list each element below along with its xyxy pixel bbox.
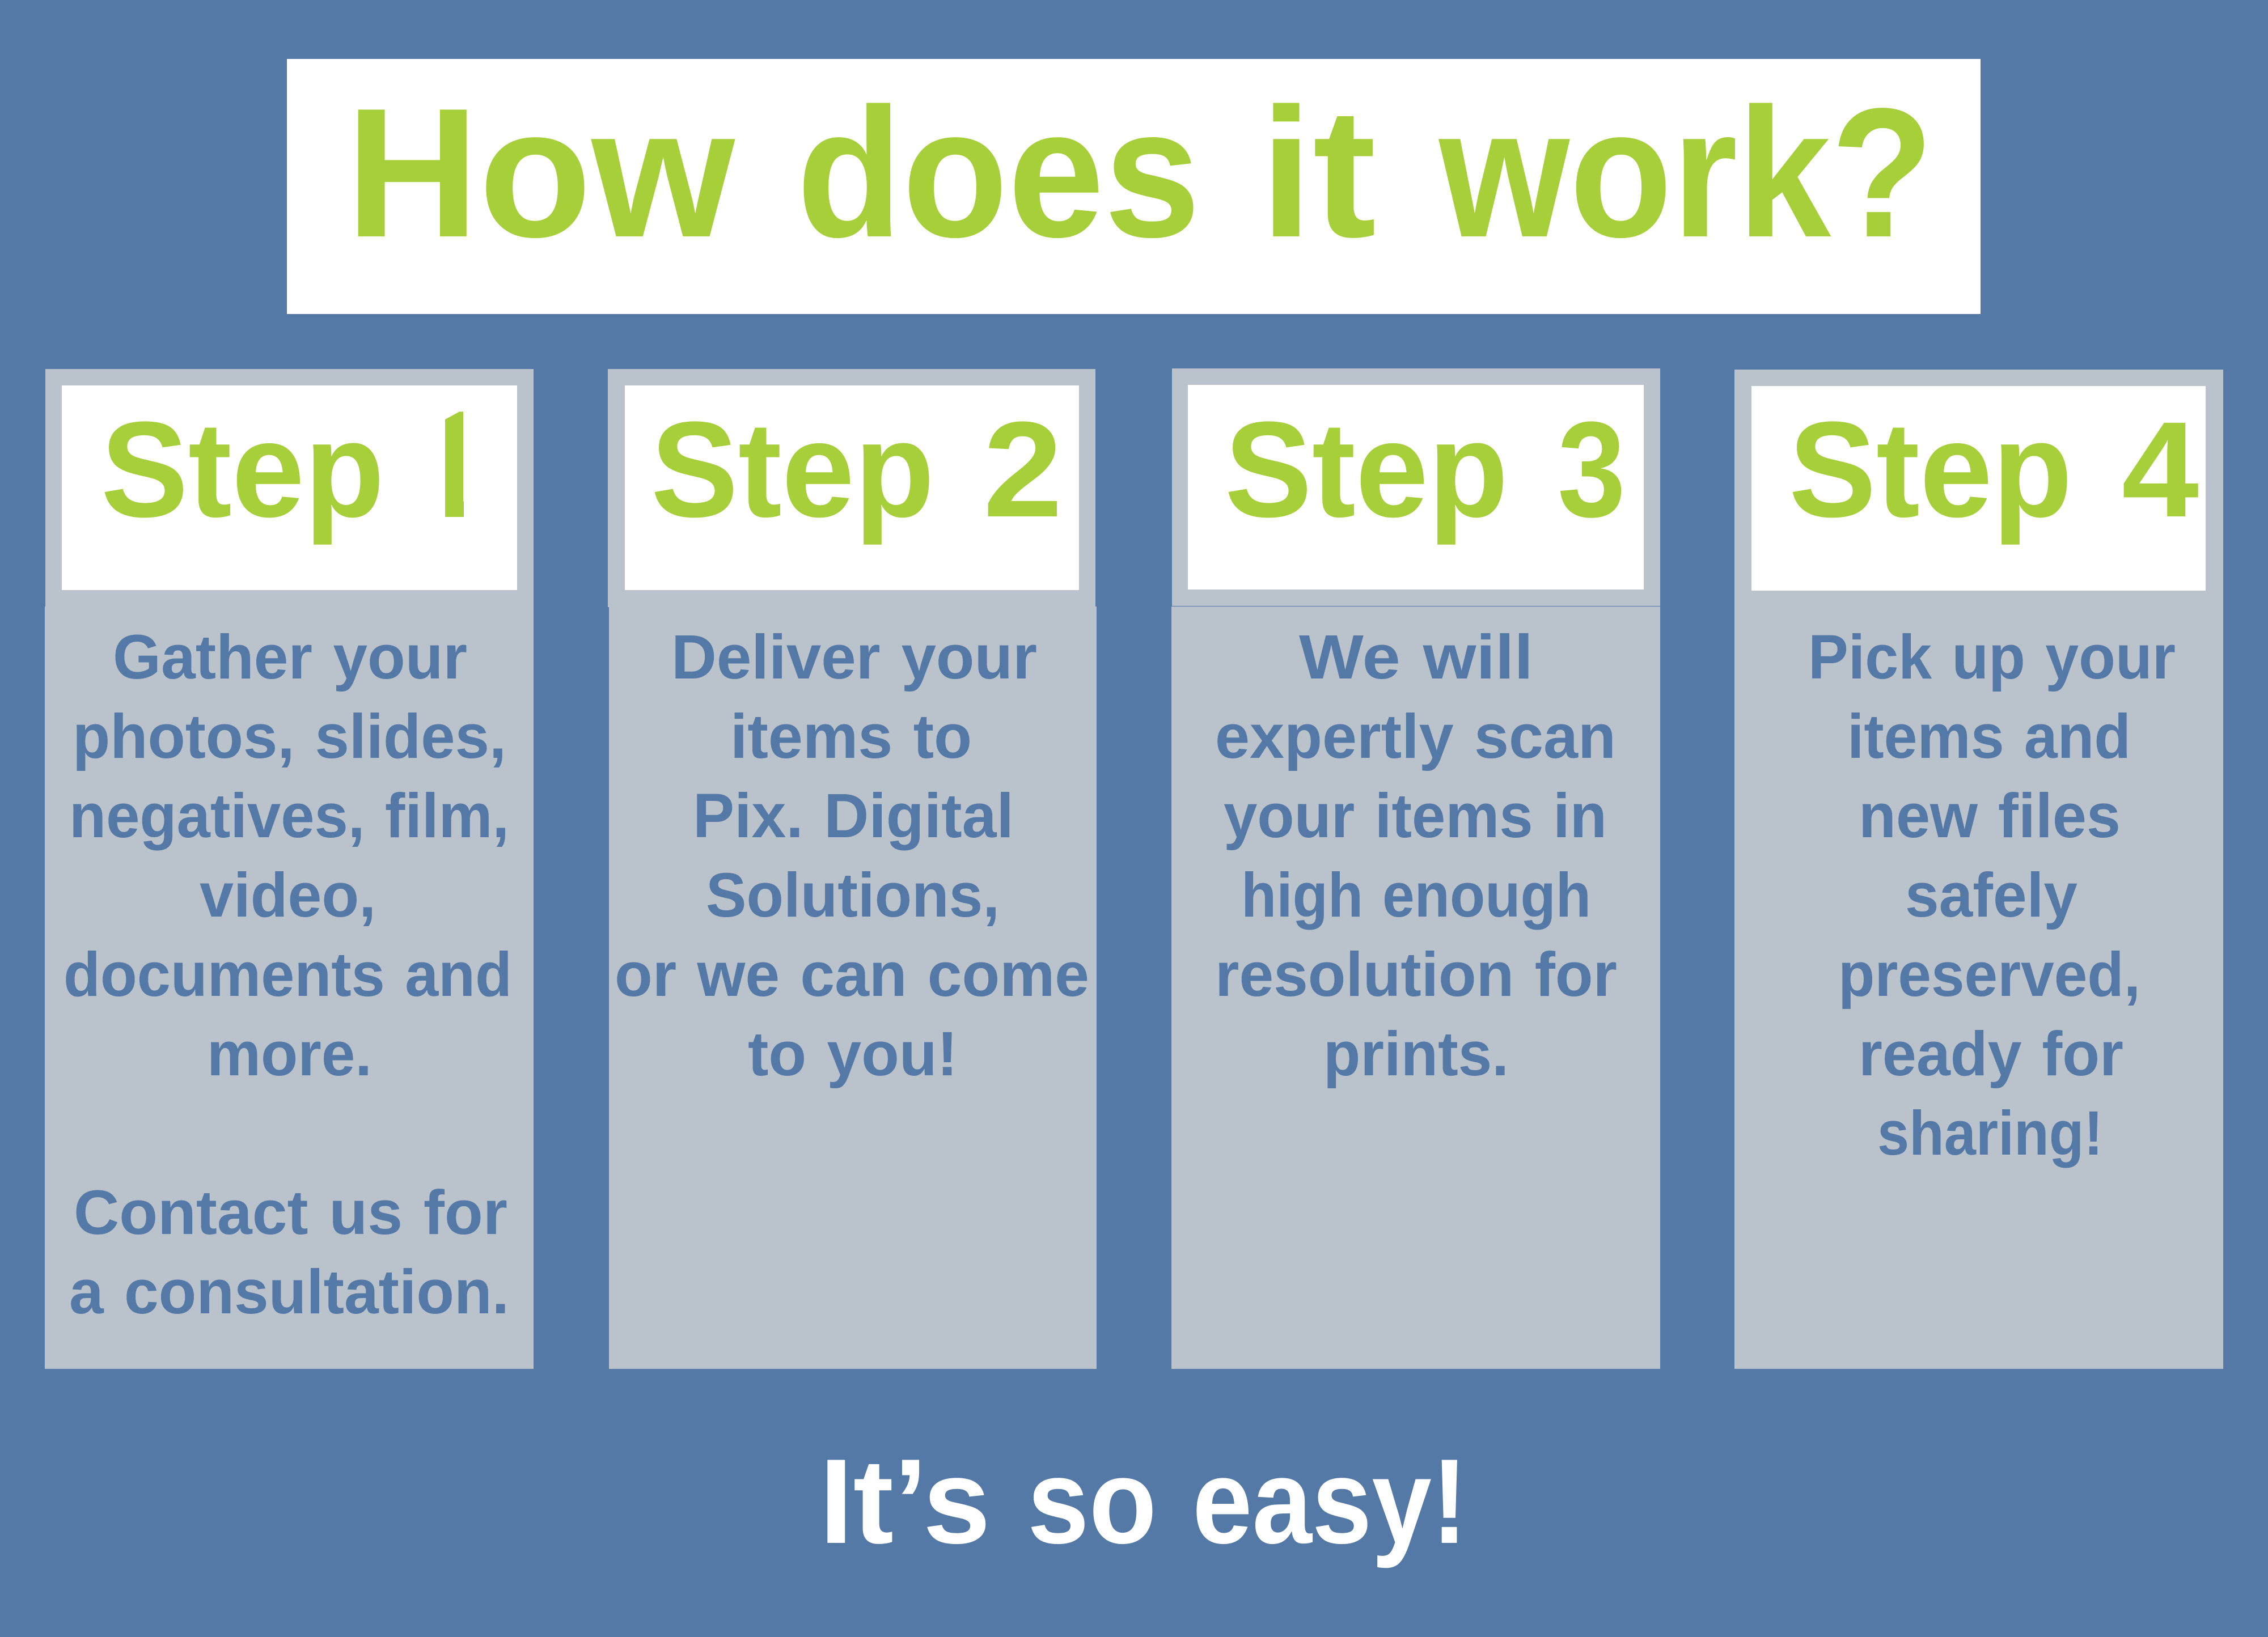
footer tagline: so <box>1027 1434 1157 1569</box>
panel: step 1 <box>45 369 534 1369</box>
heading: step 1: Step <box>101 393 384 545</box>
text block: step 4 description: safely <box>1905 860 2077 930</box>
text block: step 1 description: photos, slides, <box>73 702 506 771</box>
text block: step 1 description: Contact us for <box>74 1178 507 1248</box>
title text <box>346 70 1933 275</box>
text block: step 3 description: expertly scan <box>1215 702 1616 771</box>
title text: work? <box>1436 70 1933 275</box>
heading: step 2: Step <box>651 393 934 545</box>
panel: step 2 <box>608 369 1097 1369</box>
text block: step 2 description: Deliver your <box>671 622 1037 692</box>
text block: step 1 description: a consultation. <box>69 1257 509 1327</box>
title text: does <box>797 70 1200 275</box>
text block: step 3 description: We will <box>1299 622 1533 692</box>
heading: step 3: 3 <box>1558 393 1626 545</box>
text block: step 2 description: Solutions, <box>706 860 1000 930</box>
panel: step 4 <box>1734 370 2223 1369</box>
heading: step 3: Step <box>1225 393 1508 545</box>
text block: step 2 description: Pix. Digital <box>693 781 1014 851</box>
text block: step 4 description: new files <box>1859 781 2121 851</box>
text block: step 4 description <box>1808 622 2176 1168</box>
panel: step 3 <box>1171 368 1660 1369</box>
heading: step 1: 1 <box>407 379 492 550</box>
text block: step 1 description: documents and <box>64 940 512 1010</box>
text block: step 3 description: prints. <box>1323 1019 1509 1089</box>
text block: step 1 description: Gather your <box>113 622 467 692</box>
text block: step 1 description <box>64 622 512 1327</box>
title text: How <box>346 70 735 275</box>
text block: step 4 description: Pick up your <box>1808 622 2176 692</box>
title text: it <box>1260 70 1376 275</box>
footer tagline: easy! <box>1192 1434 1467 1569</box>
text block: step 2 description: to you! <box>748 1019 958 1089</box>
text block: step 3 description <box>1215 622 1617 1089</box>
text block: step 3 description: high enough <box>1241 860 1591 930</box>
heading: step 4: 4 <box>2122 393 2199 545</box>
text block: step 4 description: preserved, <box>1838 940 2140 1010</box>
text block: step 2 description: or we can come <box>615 940 1089 1010</box>
text block: step 4 description: ready for <box>1859 1019 2123 1089</box>
title banner <box>287 59 1981 314</box>
footer tagline <box>819 1434 1467 1569</box>
text block: step 1 description: video, <box>200 860 376 930</box>
text block: step 2 description: items to <box>730 702 972 771</box>
text block: step 4 description: sharing! <box>1877 1099 2103 1168</box>
text block: step 3 description: resolution for <box>1215 940 1617 1010</box>
text block: step 2 description <box>615 622 1089 1089</box>
text block: step 1 description: more. <box>207 1019 372 1089</box>
footer tagline: It’s <box>819 1434 991 1569</box>
text block: step 4 description: items and <box>1847 702 2131 771</box>
heading: step 2: 2 <box>983 393 1063 545</box>
text block: step 1 description: negatives, film, <box>69 781 509 851</box>
text block: step 3 description: your items in <box>1224 781 1607 851</box>
heading: step 4: Step <box>1789 393 2072 545</box>
